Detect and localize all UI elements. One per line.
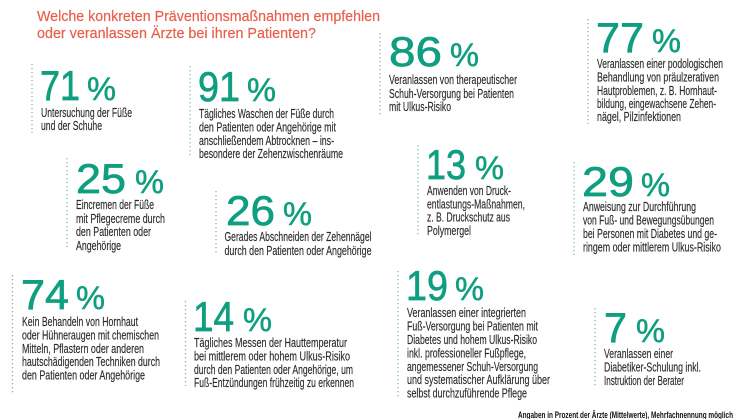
stat: 7 percent [595, 304, 701, 388]
stat: 74 percent: Mitteln, Pflastern oder anderen [22, 341, 144, 356]
stat: 19 percent: angemessener Schuh-Versorgung [407, 359, 538, 374]
stat: 13 percent: Polymergel [427, 223, 471, 238]
stat: 25 percent: 25 [76, 155, 126, 202]
stat: 71 percent: und der Schuhe [41, 118, 102, 133]
stat: 86 percent: mit Ulkus-Risiko [389, 99, 451, 114]
stat: 13 percent: Anwenden von Druck- [427, 183, 511, 198]
stat: 14 percent: bei mittlerem oder hohem Ulkus-Risiko [194, 348, 350, 364]
title: oder veranlassen Ärzte bei ihren Patienten? [37, 25, 316, 42]
stat: 7 percent: Diabetiker-Schulung inkl. [604, 360, 701, 374]
stat: 13 percent [418, 141, 525, 238]
stat: 26 percent: durch den Patienten oder Angehörige [224, 243, 372, 258]
stat: 19 percent: % [455, 271, 484, 307]
stat: 91 percent: besondere der Zehenzwischenräume [199, 146, 343, 161]
stat: 7 percent: % [636, 313, 665, 349]
stat: 13 percent: 13 [426, 141, 466, 188]
stat: 86 percent: 86 [389, 28, 442, 75]
stat: 77 percent: 77 [596, 14, 644, 61]
stat: 19 percent: Veranlassen einer integrierten [407, 305, 526, 320]
stat: 29 percent: 29 [582, 158, 634, 205]
stat: 26 percent: 26 [226, 187, 275, 234]
stat: 25 percent: mit Pflegecreme durch [76, 211, 165, 226]
stat: 14 percent: 14 [193, 293, 234, 340]
stat: 74 percent: % [76, 280, 105, 316]
stat: 91 percent: Tägliches Waschen der Füße durch [199, 106, 334, 121]
title: Welche konkreten Präventionsmaßnahmen empfehlen [37, 8, 380, 25]
stat: 29 percent: Anweisung zur Durchführung [583, 199, 696, 214]
stat: 14 percent: % [243, 302, 272, 338]
stat: 29 percent [574, 158, 721, 255]
stat: 25 percent: den Patienten oder [76, 224, 151, 239]
stat: 71 percent: Untersuchung der Füße [41, 105, 132, 120]
stat: 77 percent: nägel, Pilzinfektionen [597, 109, 681, 124]
stat: 86 percent: Schuh-Versorgung bei Patienten [389, 86, 514, 101]
stat: 74 percent: 74 [21, 271, 69, 318]
stat: 91 percent: 91 [198, 63, 240, 110]
stat: 13 percent: entlastungs-Maßnahmen, [427, 196, 525, 212]
stat: 19 percent: Diabetes und hohem Ulkus-Risiko [407, 332, 537, 347]
stat: 71 percent: % [87, 71, 116, 107]
stat: 26 percent: Gerades Abschneiden der Zehennägel [224, 229, 372, 244]
stat: 74 percent: Kein Behandeln von Hornhaut [22, 314, 138, 329]
stat: 25 percent: Eincremen der Füße [76, 197, 154, 212]
stat: 19 percent: und systematischer Aufklärung über [407, 372, 550, 387]
stat: 7 percent: Instruktion der Berater [604, 373, 684, 388]
stat: 19 percent [398, 262, 550, 400]
stat: 19 percent: 19 [406, 262, 448, 309]
stat: 25 percent: Angehörige [76, 238, 121, 253]
stat: 71 percent: 71 [40, 62, 80, 109]
stat: 14 percent: Fuß-Entzündungen frühzeitig zu erkennen [194, 375, 354, 390]
stat: 74 percent: den Patienten oder Angehörige [22, 368, 145, 382]
stat: 77 percent: % [652, 23, 681, 59]
stat: 91 percent [190, 63, 343, 161]
stat: 86 percent: % [450, 37, 479, 73]
stat: 74 percent: oder Hühneraugen mit chemischen [22, 328, 159, 342]
stat: 26 percent: % [283, 196, 312, 232]
stat: 19 percent: inkl. professioneller Fußpflege, [407, 346, 526, 360]
stat: 7 percent: Veranlassen einer [604, 346, 673, 361]
stat: 86 percent: Veranlassen von therapeutischer [389, 72, 517, 87]
stat: 74 percent [12, 271, 160, 394]
stat: 14 percent [186, 293, 354, 390]
stat: 19 percent: selbst durchzuführende Pflege [407, 386, 527, 400]
stat: 7 percent: 7 [604, 304, 627, 351]
stat: 86 percent [380, 28, 517, 117]
stat: 19 percent: Fuß-Versorgung bei Patienten mit [407, 318, 538, 334]
stat: 71 percent [32, 62, 132, 133]
stat: 91 percent: % [247, 72, 276, 108]
stat: 74 percent: hautschädigenden Techniken durch [22, 354, 160, 369]
title [37, 8, 380, 42]
stat: 13 percent: % [475, 150, 504, 186]
stat: 25 percent [67, 155, 165, 253]
stat: 91 percent: anschließendem Abtrocknen – ins- [199, 133, 334, 148]
stat: 29 percent: % [641, 167, 670, 203]
stat: 77 percent [588, 14, 723, 124]
stat: 14 percent: Tägliches Messen der Hauttemperatur [194, 335, 347, 350]
stat: 13 percent: z. B. Druckschutz aus [427, 210, 510, 224]
stat: 25 percent: % [135, 164, 164, 200]
stat: 91 percent: den Patienten oder Angehörige mit [199, 120, 336, 134]
stat: 14 percent: durch den Patienten oder Angehörige, um [194, 362, 353, 377]
stat: 26 percent [216, 187, 372, 258]
